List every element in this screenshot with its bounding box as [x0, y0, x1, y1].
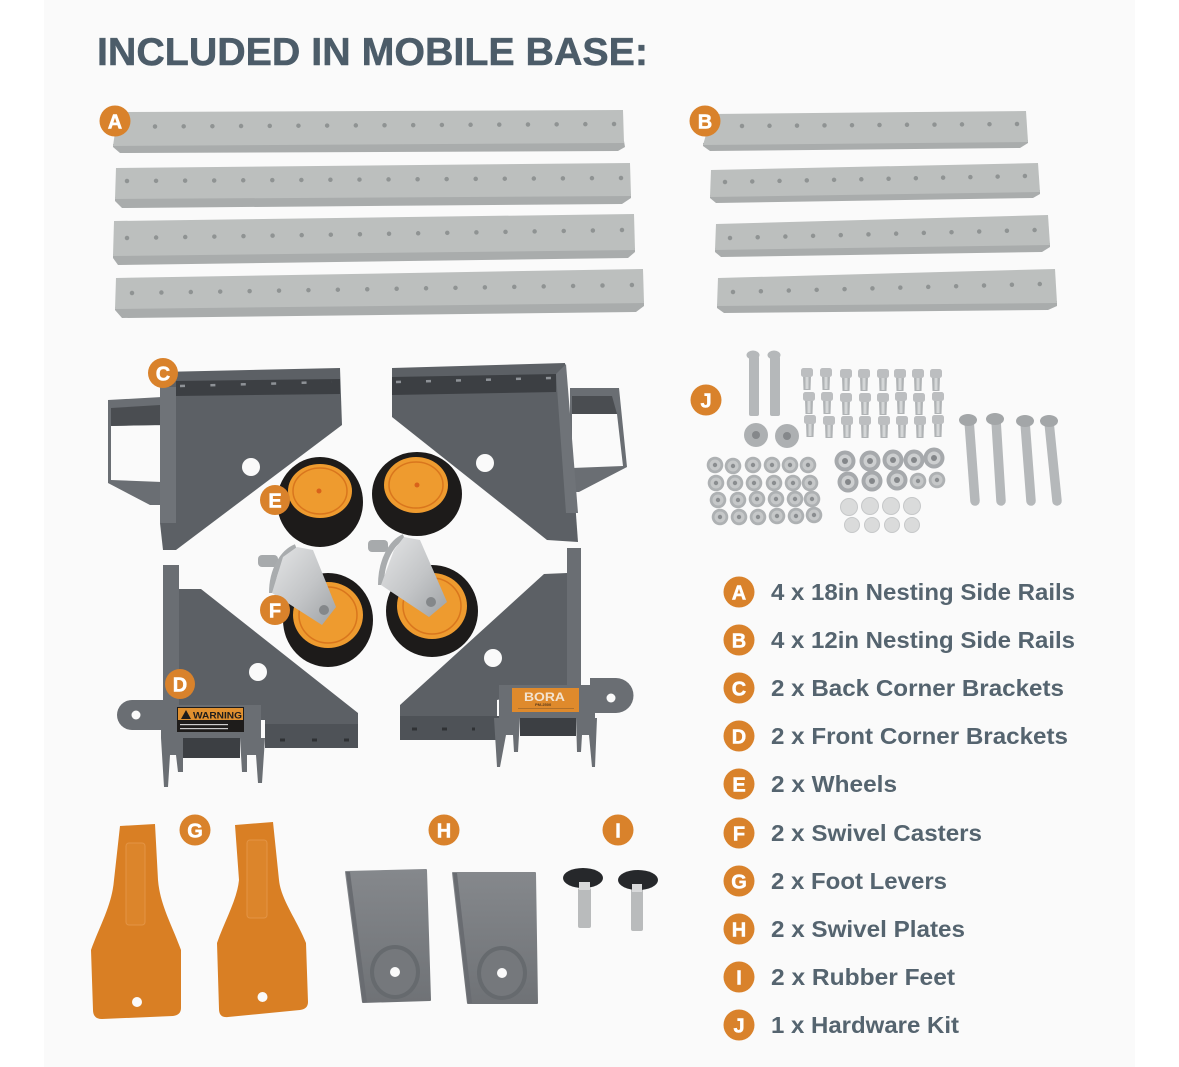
letter badges on parts: D [173, 674, 187, 696]
letter badges on parts: F [269, 600, 281, 622]
right caster [368, 537, 478, 657]
part I: rubber feet [563, 868, 658, 931]
parts legend list: 2 x Foot Levers [771, 868, 947, 894]
BORA label [512, 688, 579, 712]
letter badges on parts: G [187, 820, 203, 842]
parts legend list: 2 x Swivel Plates [771, 916, 965, 942]
title: INCLUDED IN MOBILE BASE: [97, 31, 648, 74]
letter badges on parts: I [615, 820, 621, 842]
warning label: WARNING [193, 710, 242, 722]
BORA label: BORA [524, 690, 565, 704]
parts legend list: E [732, 774, 746, 796]
part E: wheels [277, 452, 462, 547]
part G: foot levers [91, 822, 308, 1019]
parts legend list: 2 x Wheels [771, 771, 897, 797]
letter badges on parts: A [108, 112, 122, 134]
parts legend list: C [732, 678, 746, 700]
part J: hardware kit [707, 350, 1058, 532]
small nut grid [707, 457, 822, 525]
right back bracket [392, 363, 627, 542]
parts legend list: H [732, 920, 746, 942]
washers [840, 498, 920, 532]
parts legend list: D [732, 726, 746, 748]
BORA label: PM-2500 [535, 702, 552, 707]
part A: 18in side rails [113, 110, 644, 318]
parts legend list: A [732, 582, 746, 604]
parts legend list: 4 x 12in Nesting Side Rails [771, 627, 1075, 653]
letter badges on parts: H [437, 820, 451, 842]
parts legend list: J [733, 1016, 745, 1038]
left back bracket [108, 368, 342, 550]
letter badges on parts: C [156, 364, 170, 386]
hex and lock nuts [834, 448, 945, 492]
parts legend list: 2 x Front Corner Brackets [771, 723, 1068, 749]
left caster [258, 547, 373, 667]
parts legend list: 2 x Back Corner Brackets [771, 675, 1064, 701]
parts legend list: I [736, 968, 742, 990]
four long bolts [959, 413, 1058, 501]
flange nuts [744, 423, 799, 448]
parts legend list: 1 x Hardware Kit [771, 1012, 959, 1038]
warning label [177, 707, 244, 732]
parts legend list: 2 x Rubber Feet [771, 964, 955, 990]
part D: front corner brackets [117, 548, 634, 787]
left front bracket with warning label [117, 565, 358, 787]
part F: swivel casters [258, 537, 478, 667]
parts legend list: B [732, 630, 746, 652]
part H: swivel plates [346, 870, 537, 1003]
parts legend list: G [731, 872, 747, 894]
letter badges on parts: B [698, 112, 712, 134]
parts legend list: 4 x 18in Nesting Side Rails [771, 579, 1075, 605]
parts legend list: F [733, 824, 745, 846]
short bolt rows [801, 368, 944, 438]
part C: back corner brackets [108, 363, 627, 550]
letter badges on parts [100, 106, 722, 846]
right front bracket with BORA label [400, 548, 634, 767]
letter badges on parts: E [268, 490, 282, 512]
parts legend list [724, 576, 1075, 1040]
two medium bolts [746, 350, 780, 416]
parts legend list: 2 x Swivel Casters [771, 820, 982, 846]
part B: 12in side rails [703, 111, 1057, 313]
letter badges on parts: J [700, 390, 712, 412]
